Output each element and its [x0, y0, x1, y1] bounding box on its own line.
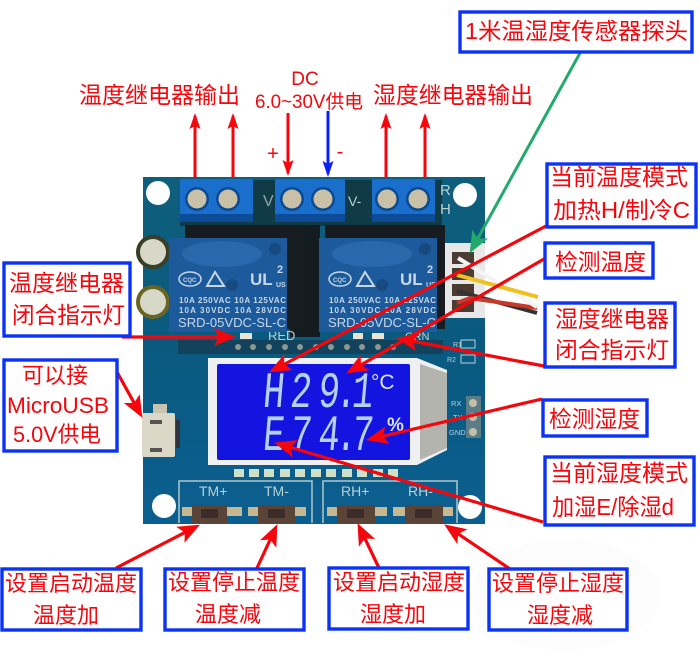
arrow: positive supply	[286, 113, 290, 173]
silkscreen labels: RED	[268, 328, 295, 343]
minus sign: -	[337, 141, 343, 163]
button labels	[199, 483, 433, 499]
arrow: humidity relay out 1	[384, 116, 388, 178]
callout: micro USB: 5.0V供电	[13, 422, 101, 447]
arrow: temperature relay out 2	[232, 116, 234, 178]
mounting holes	[146, 181, 482, 519]
relay left: UL	[250, 270, 273, 289]
relay left	[169, 238, 287, 332]
LCD display: H29.1	[261, 365, 376, 423]
callout: humidity relay indicator: 闭合指示灯	[555, 337, 669, 363]
arrow: detected humidity	[371, 399, 542, 439]
arrow: RH- button	[448, 527, 510, 569]
arrow: humidity relay out 2	[424, 116, 426, 178]
silkscreen labels: V	[263, 193, 274, 210]
callout: start humidity: 湿度加	[360, 602, 426, 627]
silkscreen labels: V-	[348, 193, 362, 209]
relay left: 10A 250VAC 10A 125VAC	[179, 296, 286, 305]
header pins	[235, 344, 396, 350]
arrow: temperature relay indicator	[122, 335, 231, 339]
LCD display: °C	[371, 371, 395, 394]
LCD display: E74.7	[261, 408, 376, 466]
serial header: TX	[453, 413, 463, 422]
arrow: detected temperature	[350, 259, 544, 371]
relay bases	[185, 225, 445, 329]
indicator LEDs	[240, 333, 384, 339]
arrow: TM- button	[257, 529, 275, 568]
arrow: micro USB	[117, 372, 140, 414]
relay left: US	[276, 282, 286, 289]
serial header: GND	[449, 428, 466, 437]
button labels: TM+	[199, 483, 227, 499]
arrow: sensor probe	[472, 53, 580, 249]
LCD display: %	[387, 415, 404, 436]
arrow: temperature mode	[274, 226, 546, 370]
relay right: US	[426, 282, 436, 289]
callout: temperature relay indicator: 闭合指示灯	[12, 302, 125, 328]
R1 R2 pads	[447, 340, 475, 364]
callout: start temperature	[2, 569, 141, 630]
faint background smudge	[470, 540, 660, 650]
silkscreen labels	[263, 182, 451, 343]
arrow: negative supply	[326, 111, 330, 174]
callout: micro USB: 可以接	[22, 363, 88, 388]
silkscreen labels: GRN	[405, 331, 430, 343]
relay right: CQC	[333, 278, 347, 284]
callout: sensor probe	[460, 12, 692, 52]
label: DC supply: 6.0~30V供电	[255, 91, 363, 113]
callout: start humidity: 设置启动湿度	[333, 570, 465, 595]
relay left: 10A 30VDC 10A 28VDC	[179, 306, 286, 315]
capacitors	[136, 235, 170, 319]
tactile buttons	[182, 505, 453, 523]
relay left: CQC	[183, 278, 197, 284]
callout: micro USB	[4, 360, 117, 451]
relay left: SRD-05VDC-SL-C	[178, 315, 286, 330]
silkscreen labels: R	[440, 182, 451, 199]
arrow: humidity mode	[279, 444, 543, 522]
callout: stop temperature: 设置停止温度	[168, 570, 300, 595]
sensor connector and wires	[445, 243, 538, 318]
serial header: RX	[451, 399, 461, 408]
callout: humidity relay indicator	[545, 303, 675, 367]
callout: stop temperature	[165, 569, 304, 630]
callout: temperature mode: 加热H/制冷C	[553, 197, 690, 223]
button outlines	[179, 481, 457, 523]
callout: humidity relay indicator: 湿度继电器	[555, 306, 669, 332]
relay right	[319, 238, 437, 332]
arrow: RH+ button	[360, 528, 379, 568]
callout: temperature relay indicator	[4, 263, 130, 336]
callout: detected humidity: 检测湿度	[549, 406, 640, 432]
plus sign: +	[267, 143, 279, 165]
label: humidity relay output: 湿度继电器输出	[373, 82, 533, 108]
callout: detected temperature	[545, 243, 653, 278]
relay right: 10A 30VDC 10A 28VDC	[329, 306, 436, 315]
serial header	[449, 396, 481, 438]
R1 R2 pads: R2	[447, 357, 456, 364]
R1 R2 pads: R1	[453, 342, 462, 349]
callout: stop humidity	[489, 569, 627, 630]
label: DC supply	[255, 69, 363, 113]
arrow: TM+ button	[116, 527, 196, 568]
callout: start temperature: 设置启动温度	[5, 571, 137, 596]
callout: stop humidity: 设置停止湿度	[492, 571, 624, 596]
screw terminals	[180, 179, 435, 222]
callout: stop humidity: 湿度减	[527, 603, 593, 628]
relay left: 2	[277, 264, 283, 276]
arrow: humidity relay indicator	[401, 339, 544, 366]
circuit board	[136, 177, 538, 524]
callout: humidity mode	[545, 457, 694, 525]
arrow: temperature relay out 1	[194, 116, 196, 178]
callout: stop temperature: 温度减	[195, 602, 261, 627]
silkscreen labels: H	[440, 201, 451, 218]
callout: humidity mode: 当前湿度模式	[550, 460, 688, 486]
callout: micro USB: MicroUSB	[7, 393, 109, 418]
label: DC supply: DC	[291, 69, 319, 90]
LCD contact row	[234, 469, 398, 477]
callout: detected temperature: 检测温度	[555, 249, 646, 275]
callout: temperature mode	[547, 164, 696, 227]
relay right: 10A 250VAC 10A 125VAC	[329, 296, 436, 305]
relay right: UL	[400, 270, 423, 289]
callout: start humidity	[329, 568, 468, 629]
relay right: SRD-05VDC-SL-C	[328, 315, 436, 330]
relay right: 2	[427, 264, 433, 276]
LCD display	[208, 358, 447, 466]
button labels: TM-	[264, 483, 289, 499]
label: temperature relay output: 温度继电器输出	[79, 82, 240, 108]
button labels: RH+	[341, 483, 369, 499]
callout: detected humidity	[543, 400, 647, 436]
USB connector	[142, 404, 180, 457]
callout: sensor probe: 1米温湿度传感器探头	[465, 18, 688, 44]
callout: humidity mode: 加湿E/除湿d	[552, 494, 674, 520]
callout: temperature mode: 当前温度模式	[550, 164, 688, 190]
callout: start temperature: 温度加	[33, 603, 99, 628]
callout: temperature relay indicator: 温度继电器	[9, 270, 124, 296]
button labels: RH-	[408, 483, 433, 499]
